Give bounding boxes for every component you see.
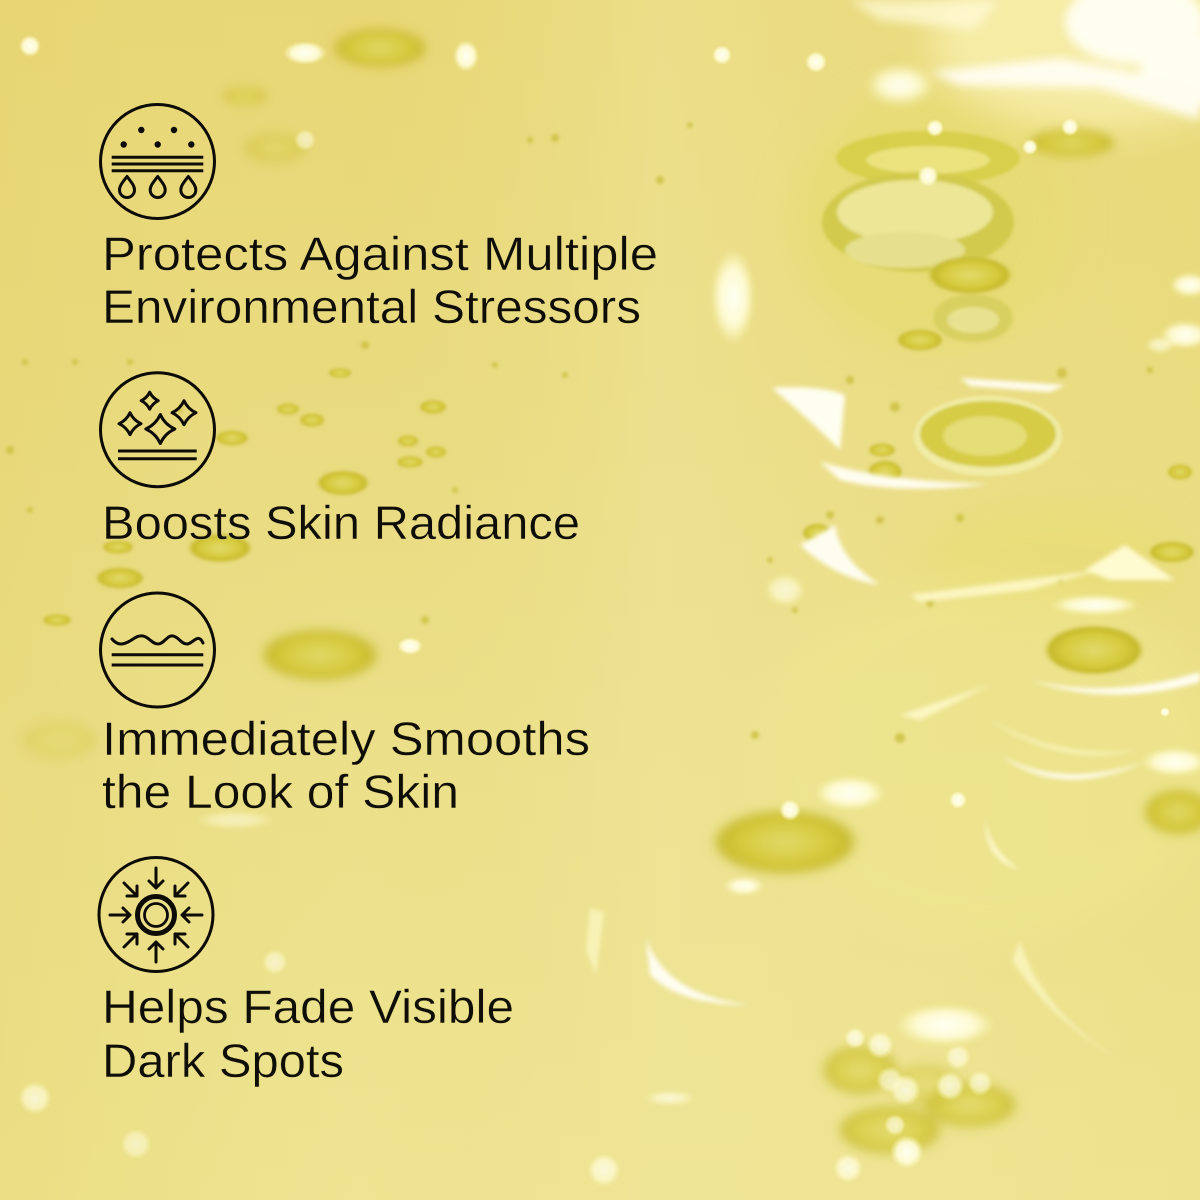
text: smooths heading <box>102 712 590 818</box>
benefit 1: protects against stressors <box>100 104 658 333</box>
text: smooths heading: the Look of Skin <box>102 765 459 818</box>
text: radiance heading: Boosts Skin Radiance <box>102 496 580 549</box>
text: dark spots heading: Dark Spots <box>102 1034 344 1087</box>
benefit 2: boosts radiance <box>100 373 580 549</box>
text: dark spots heading <box>102 980 514 1087</box>
text: protects heading: Protects Against Multiple <box>102 227 658 280</box>
text: smooths heading: Immediately Smooths <box>102 712 590 765</box>
icon: particles, skin layers and drops <box>100 104 214 218</box>
text: protects heading <box>102 227 658 333</box>
icon: wave over skin layers <box>100 593 214 707</box>
benefit 3: smooths skin <box>100 593 590 818</box>
text: dark spots heading: Helps Fade Visible <box>102 980 514 1033</box>
icon: arrows converging on spot <box>99 858 213 972</box>
icon: sparkles over skin layers <box>100 373 214 487</box>
text: protects heading: Environmental Stressors <box>102 280 641 333</box>
benefit 4: fades dark spots <box>99 858 514 1087</box>
